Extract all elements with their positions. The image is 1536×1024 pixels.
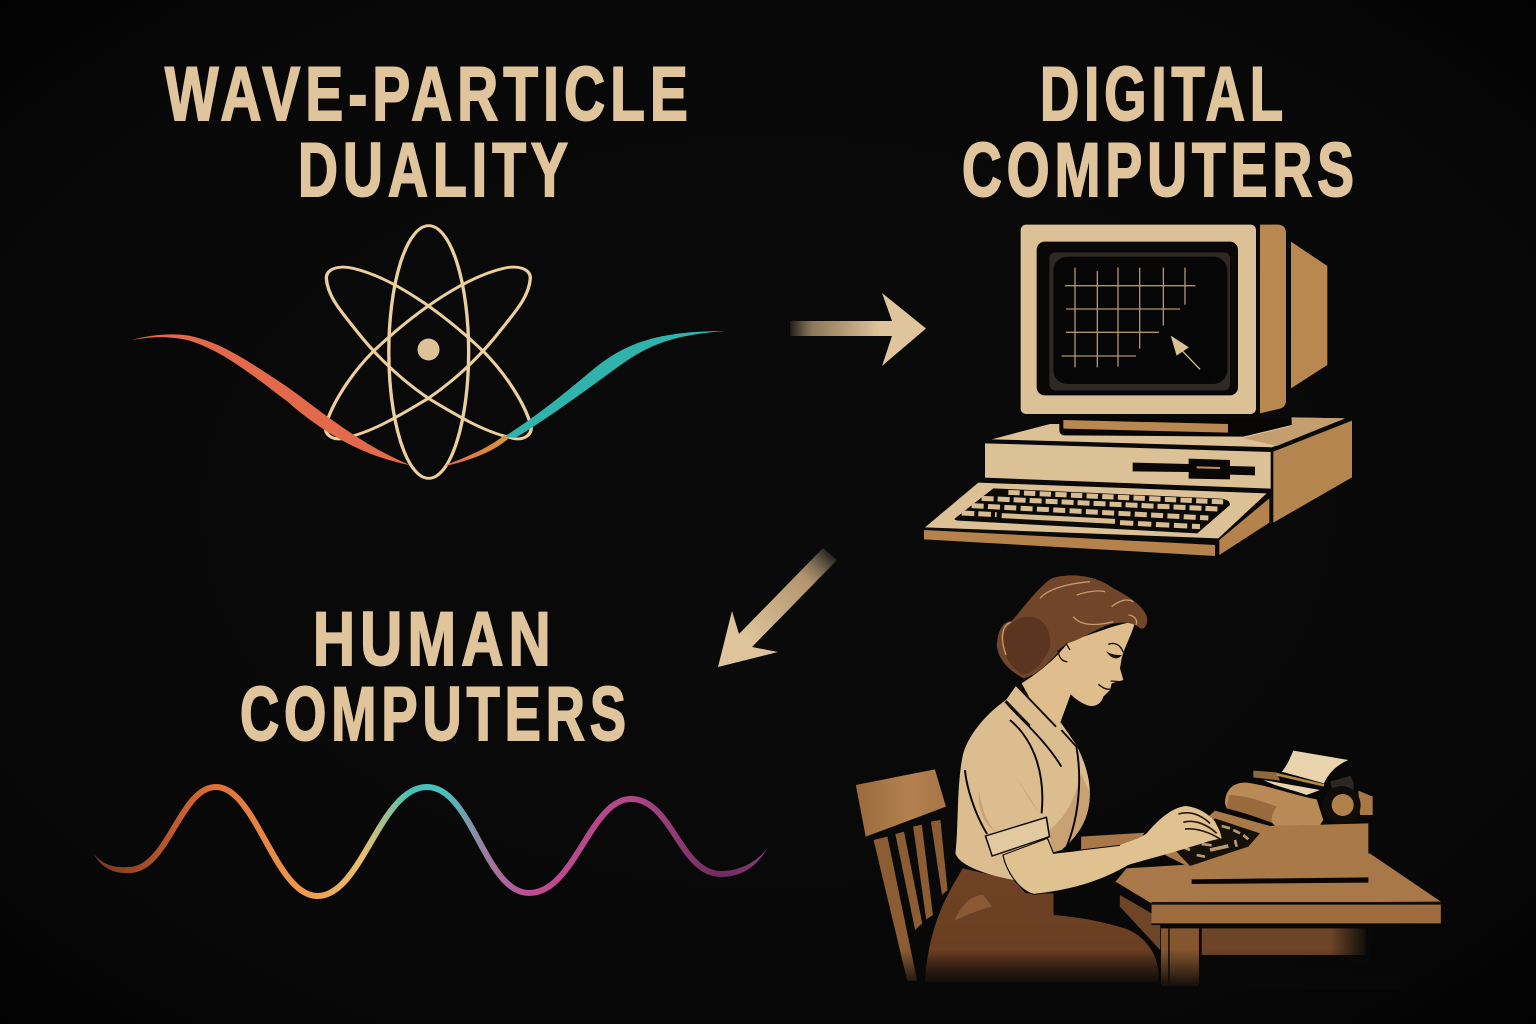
head: [997, 575, 1147, 728]
desk apron fade: [1330, 925, 1370, 965]
atom orbits: [326, 226, 531, 478]
title: wave-particle duality: [165, 52, 693, 213]
icon: atom with wave ribbon: [132, 226, 725, 478]
wave ribbon: [132, 331, 725, 466]
arrow: to digital computers: [790, 293, 926, 366]
hand: [1120, 806, 1222, 868]
title: wave-particle duality: WAVE-PARTICLE: [165, 52, 693, 137]
keyboard: [924, 483, 1269, 556]
floppy drive: [1133, 459, 1255, 479]
title: digital computers: [962, 52, 1359, 213]
typewriter: [1165, 751, 1373, 884]
monitor: [1021, 225, 1327, 414]
blouse: [955, 686, 1090, 880]
arm: [1003, 838, 1140, 894]
facial features: [1006, 643, 1123, 727]
title: digital computers: COMPUTERS: [962, 128, 1359, 213]
arrow: to human computers: [718, 548, 837, 667]
blouse lines: [965, 702, 1079, 850]
title: wave-particle duality: DUALITY: [298, 128, 573, 213]
skirt: [925, 868, 1159, 982]
atom nucleus: [418, 338, 440, 360]
title: human computers: COMPUTERS: [240, 672, 631, 757]
cursor arrow: [1171, 336, 1200, 369]
title: digital computers: DIGITAL: [1040, 52, 1288, 137]
table: [1081, 833, 1441, 986]
title: human computers: [240, 597, 631, 757]
illustration: woman at typewriter: [856, 575, 1441, 986]
bottom fade: [860, 950, 1400, 990]
screen grid: [1062, 267, 1195, 367]
chair: [856, 769, 948, 981]
wave: human computers: [94, 787, 767, 896]
title: human computers: HUMAN: [313, 597, 556, 682]
icon: vintage computer: [924, 225, 1352, 556]
computer base unit: [985, 417, 1352, 523]
sleeve cuff: [985, 817, 1050, 856]
